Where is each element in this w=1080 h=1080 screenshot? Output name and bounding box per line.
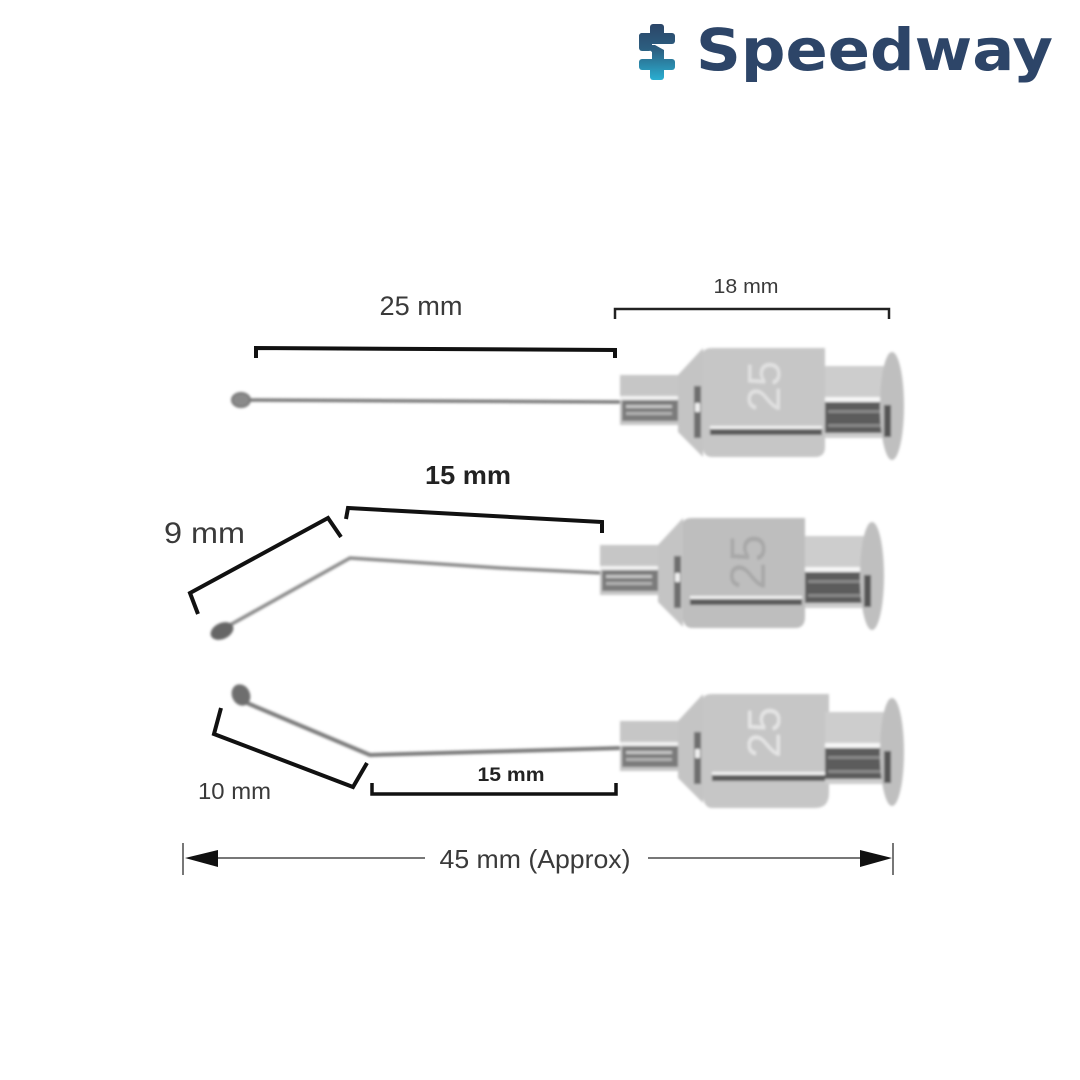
hub: 25 xyxy=(720,534,776,590)
bracket: 18 mm xyxy=(615,309,889,319)
straight cannula xyxy=(232,348,904,460)
bracket: 15 mm upper xyxy=(346,508,602,533)
label: 15 mm bold: 15 mm xyxy=(425,460,511,490)
angled cannula, downward bend xyxy=(228,681,904,808)
needle shaft xyxy=(247,400,622,402)
angled cannula, upward tip xyxy=(208,518,884,643)
needle shaft xyxy=(230,558,602,625)
ball tip xyxy=(208,619,236,643)
label: 10 mm: 10 mm xyxy=(198,778,271,804)
bracket: 25 mm xyxy=(256,348,615,358)
label: 25 mm: 25 mm xyxy=(380,291,462,321)
label: 18 mm: 18 mm xyxy=(714,276,778,298)
hub: 25 xyxy=(738,707,790,758)
label: 9 mm: 9 mm xyxy=(164,517,245,550)
dimension arrow: 45 mm overall xyxy=(183,843,893,875)
label: 15 mm lower: 15 mm xyxy=(478,765,544,786)
logo: Speedway xyxy=(639,16,1053,84)
hub xyxy=(620,694,904,808)
wordmark: Speedway xyxy=(696,16,1053,84)
hub xyxy=(620,348,904,460)
needle shaft xyxy=(247,703,622,755)
hub: 25 xyxy=(738,361,790,412)
ball tip xyxy=(232,393,250,407)
hub xyxy=(600,518,884,630)
ball tip xyxy=(228,681,254,709)
bracket: 10 mm xyxy=(214,708,367,787)
bracket: 15 mm lower xyxy=(372,783,616,794)
label: 45 mm (Approx): 45 mm (Approx) xyxy=(440,844,630,874)
icon: Speedway S mark xyxy=(639,24,675,80)
bracket: 9 mm xyxy=(190,518,341,614)
